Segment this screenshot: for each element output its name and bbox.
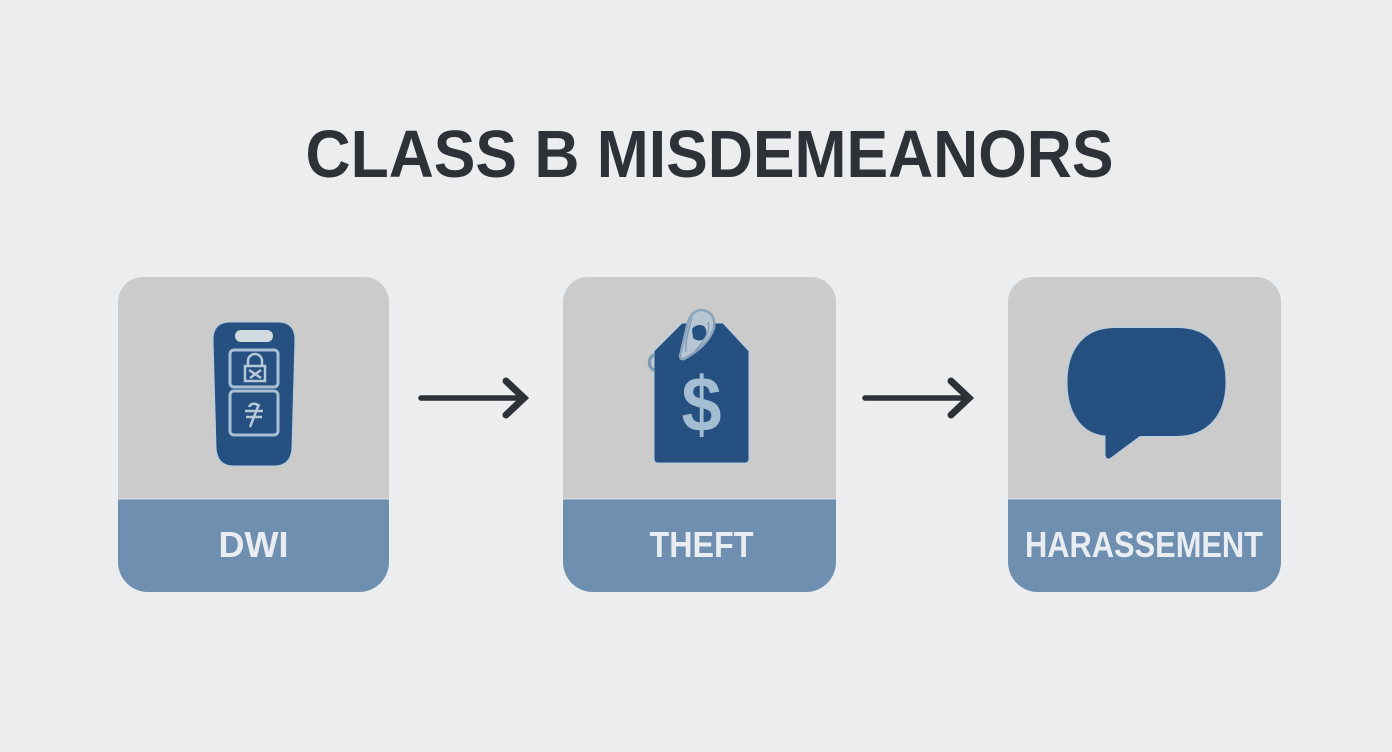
label: DWI: DWI [218, 524, 288, 565]
arrow: theft to harassment [865, 381, 969, 415]
icon: speech bubble [1067, 328, 1226, 459]
icon: price tag [649, 310, 749, 463]
title: CLASS B MISDEMEANORS [306, 117, 1114, 192]
panel: DWI [118, 277, 389, 592]
arrow: DWI to theft [421, 381, 524, 415]
panel: theft [563, 277, 836, 592]
panel: harassment [1008, 277, 1281, 592]
dollar sign: $ [682, 360, 722, 448]
label: theft: THEFT [650, 524, 754, 565]
label: harassment: HARASSEMENT [1025, 524, 1263, 565]
icon: key fob [213, 322, 295, 466]
